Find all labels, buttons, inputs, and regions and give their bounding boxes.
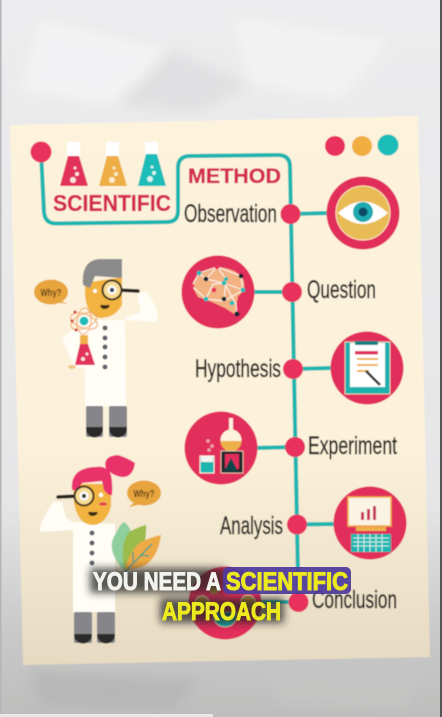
coat buttons xyxy=(90,530,94,566)
speech bubble: why: Why? xyxy=(40,288,62,299)
icon: computer with chart xyxy=(334,486,406,560)
video progress bar xyxy=(0,714,213,717)
scientist: male with flask xyxy=(34,259,158,438)
caption: scientific: SCIENTIFIC xyxy=(226,568,348,596)
speech bubble: why xyxy=(34,280,68,304)
label: conclusion: Conclusion xyxy=(312,586,397,614)
hair and ponytail xyxy=(72,455,135,495)
icon: lab experiment xyxy=(184,412,258,484)
head xyxy=(85,277,122,318)
head xyxy=(73,484,111,525)
label: hypothesis: Hypothesis xyxy=(195,355,281,383)
poster artwork xyxy=(10,116,430,665)
eye, blush and mouth xyxy=(88,493,107,516)
icon: clipboard xyxy=(330,332,404,404)
magnifier xyxy=(102,280,138,300)
teal connector line xyxy=(41,152,298,602)
step: observation xyxy=(184,176,400,250)
hair xyxy=(83,259,122,288)
caption shadow xyxy=(90,568,284,623)
step: hypothesis xyxy=(195,332,404,404)
caption overlay xyxy=(90,567,351,626)
icon: leaves xyxy=(112,522,161,572)
icon: brain network xyxy=(182,256,254,328)
step: analysis xyxy=(220,486,406,560)
step: experiment xyxy=(184,412,397,484)
step: conclusion xyxy=(188,566,397,640)
icon: red flask xyxy=(60,142,88,186)
icon: eye xyxy=(326,176,400,250)
eye and mouth xyxy=(93,289,110,309)
icon: conclusion circle xyxy=(188,566,262,640)
caption: you need a: YOU NEED A xyxy=(93,568,221,596)
heading: method: METHOD xyxy=(188,165,281,188)
right frame edge xyxy=(440,0,442,717)
icon: teal flask xyxy=(138,142,166,186)
legs xyxy=(74,612,115,644)
step: question xyxy=(182,256,376,328)
left frame edge xyxy=(0,0,2,717)
caption highlight box xyxy=(223,567,351,594)
label: analysis: Analysis xyxy=(220,512,283,540)
decorative colour dots xyxy=(325,134,398,156)
coat buttons xyxy=(102,326,108,370)
speech bubble: why: Why? xyxy=(134,489,154,500)
caption: approach: APPROACH xyxy=(162,598,281,626)
legs xyxy=(86,406,127,438)
label: experiment: Experiment xyxy=(308,432,397,460)
label: question: Question xyxy=(307,276,376,304)
lab coat xyxy=(40,502,115,612)
start dot xyxy=(30,142,52,162)
label: observation: Observation xyxy=(184,200,277,228)
heading: scientific: SCIENTIFIC xyxy=(53,190,171,216)
icon: atom xyxy=(68,307,100,335)
lab coat xyxy=(62,292,158,406)
magnifier xyxy=(58,486,94,506)
poster sheet xyxy=(10,116,430,665)
speech bubble: why xyxy=(127,480,161,507)
icon: flask in hand xyxy=(68,335,95,369)
icon: orange flask xyxy=(99,142,127,186)
scientist: female with leaves xyxy=(40,455,161,644)
